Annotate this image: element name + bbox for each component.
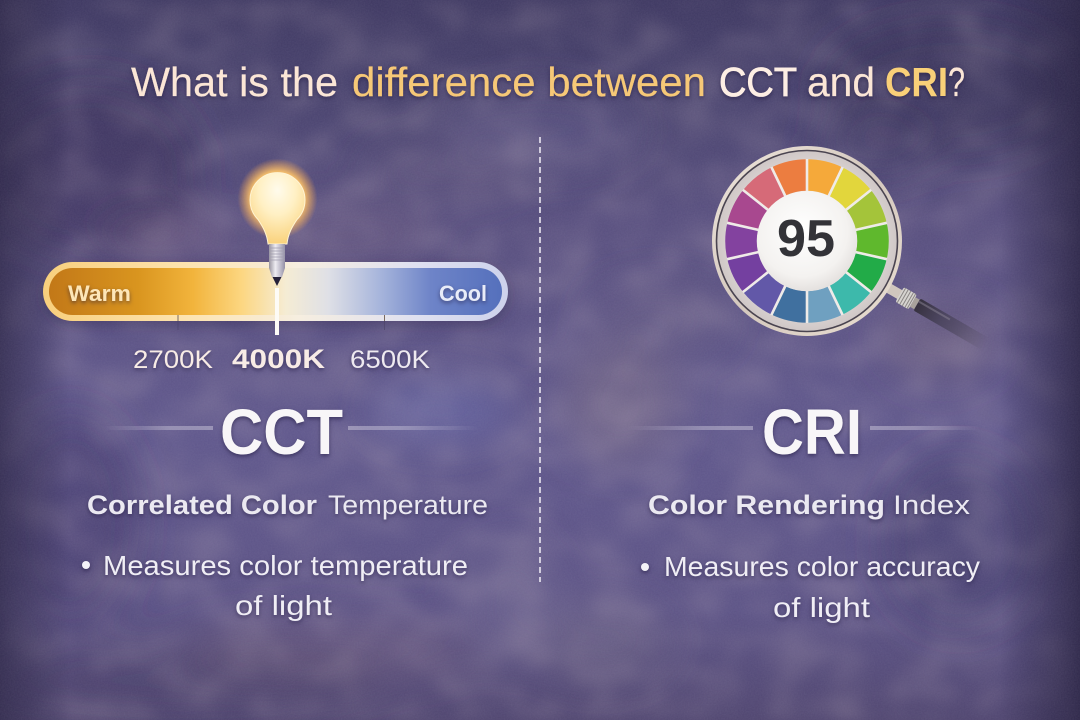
title [131,59,965,105]
marker needle [275,288,279,335]
title: CCT [719,59,797,105]
subtitle: Correlated Color Temperature: Correlated Color [87,490,318,520]
wheel separators [727,159,887,323]
subtitle: Color Rendering Index: Index [893,490,971,520]
magnifier handle [882,280,991,352]
temperature scale bar [43,262,508,330]
color wheel segments [714,148,900,334]
heading: CCT: CCT [220,396,343,468]
title: CRI [885,59,948,105]
wheel hub [757,191,857,291]
bullet text: CRI [641,551,980,623]
title: ? [948,59,965,105]
heading: CRI: CRI [762,396,862,468]
bullet text: CCT [82,550,468,621]
panel: CRI [628,146,991,623]
panel: CCT [43,158,508,621]
scale labels: 4000K [232,344,326,374]
scale labels [133,344,430,374]
bullet text: CRI: Measures color accuracy [664,551,980,582]
heading: CRI [628,396,980,468]
bullet text: CCT: of light [235,590,332,621]
center dashed divider [539,137,541,582]
bullet text: CRI: of light [773,592,870,623]
scale labels: 2700K [133,346,213,374]
scale labels: 6500K [350,346,430,374]
icon: magnifying glass with color wheel [712,146,991,352]
subtitle: Color Rendering Index [648,490,971,520]
value: 95: 95 [777,210,835,268]
icon: light bulb [238,158,318,286]
bullet text: CCT: Measures color temperature [103,550,468,581]
label: Cool: Cool [439,281,487,306]
subtitle: Color Rendering Index: Color Rendering [648,490,885,520]
lens rim [712,146,902,336]
label: Warm: Warm [68,281,131,306]
title: difference between [352,59,706,105]
title: and [807,59,875,105]
title: What is the [131,59,338,105]
heading: CCT [103,396,478,468]
subtitle: Correlated Color Temperature [87,490,488,520]
subtitle: Correlated Color Temperature: Temperature [328,490,488,520]
